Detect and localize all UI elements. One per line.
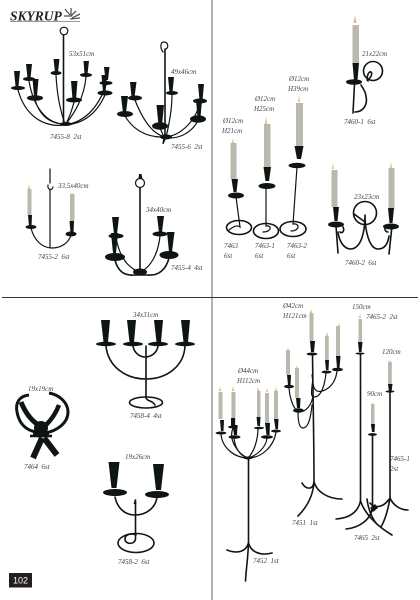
candelabra 7458-4 [96,311,195,420]
chandelier 7455-4 [105,174,204,276]
chandelier 7455-2 with candles: 33,5x40cm [57,182,89,190]
candlestick 7463: 7463 [224,242,238,250]
chandelier 7455-2 with candles [26,169,89,261]
floor candlesticks 7465 set: 150cm [352,303,371,311]
wall candle holder 7460-1 [344,15,387,126]
page number: 102 [13,576,28,586]
floor candelabra 7451: Ø42cm [282,302,303,310]
floor candlesticks 7465 set: 7465-1 [390,455,410,463]
chandelier 7455-6 [117,42,207,151]
wall candle holder 7460-1: 21x22cm [362,50,387,58]
candlestick 7463-2: 7463-2 [287,242,307,250]
chandelier 7455-8 [11,27,112,141]
floor candlesticks 7465 set [336,303,410,542]
chandelier 7455-4: 34x40cm [145,206,171,214]
floor candelabra 7452 [216,367,281,581]
floor candelabra 7451 [282,302,343,527]
floor candlesticks 7465 set: 2st [390,465,399,473]
chandelier 7455-2 with candles: 7455-2 6st [38,253,71,261]
floor candlesticks 7465 set: 7465 2st [354,534,381,542]
candlestick 7463-1 [253,95,278,260]
candelabra 7460-2 [328,162,399,267]
candelabra 7458-2: 7458-2 6st [118,558,151,566]
candlestick 7463: H21cm [221,127,242,135]
floor candlesticks 7465 set: 90cm [367,390,382,398]
floor candlesticks 7465 set: 7465-2 2st [366,313,399,321]
chandelier 7455-4: 7455-4 4st [171,264,204,272]
candelabra 7458-4: 34x31cm [132,311,158,319]
chandelier 7455-8: 7455-8 2st [50,133,83,141]
candlestick 7463-2: H39cm [287,85,308,93]
candlestick 7463-1: Ø12cm [254,95,275,103]
floor candelabra 7452: 7452 1st [253,557,280,565]
candlestick 7463-1: 6st [255,252,264,260]
candlestick 7463: Ø12cm [222,117,243,125]
candlestick 7463-1: 7463-1 [255,242,275,250]
candelabra 7458-2 [103,453,169,566]
candlestick 7463-2: 6st [287,252,296,260]
candlestick 7463-1: H25cm [253,105,274,113]
page number [9,573,32,588]
logo: Skyrup: SKYRUP [10,8,63,24]
chandelier 7455-8: 53x51cm [69,50,94,58]
floor candelabra 7451: 7451 1st [292,519,319,527]
chandelier 7455-6: 49x46cm [171,68,196,76]
candelabra 7460-2: 7460-2 6st [345,259,378,267]
candelabra 7460-2: 23x23cm [354,193,379,201]
chandelier 7455-6: 7455-6 2st [171,143,204,151]
candle ring 7464: 19x19cm [28,385,53,393]
floor candlesticks 7465 set: 120cm [382,348,401,356]
wall candle holder 7460-1: 7460-1 6st [344,118,377,126]
candlestick 7463: 6st [224,252,233,260]
candlestick 7463 [221,117,252,260]
floor candelabra 7452: Ø44cm [237,367,258,375]
candlestick 7463-2: Ø12cm [288,75,309,83]
floor candelabra 7452: H112cm [236,377,260,385]
candlestick 7463-2 [280,75,309,260]
candelabra 7458-4: 7458-4 4st [130,412,163,420]
candle ring 7464 [17,385,68,471]
candelabra 7458-2: 19x26cm [125,453,150,461]
candle ring 7464: 7464 6st [24,463,51,471]
floor candelabra 7451: H121cm [282,312,307,320]
